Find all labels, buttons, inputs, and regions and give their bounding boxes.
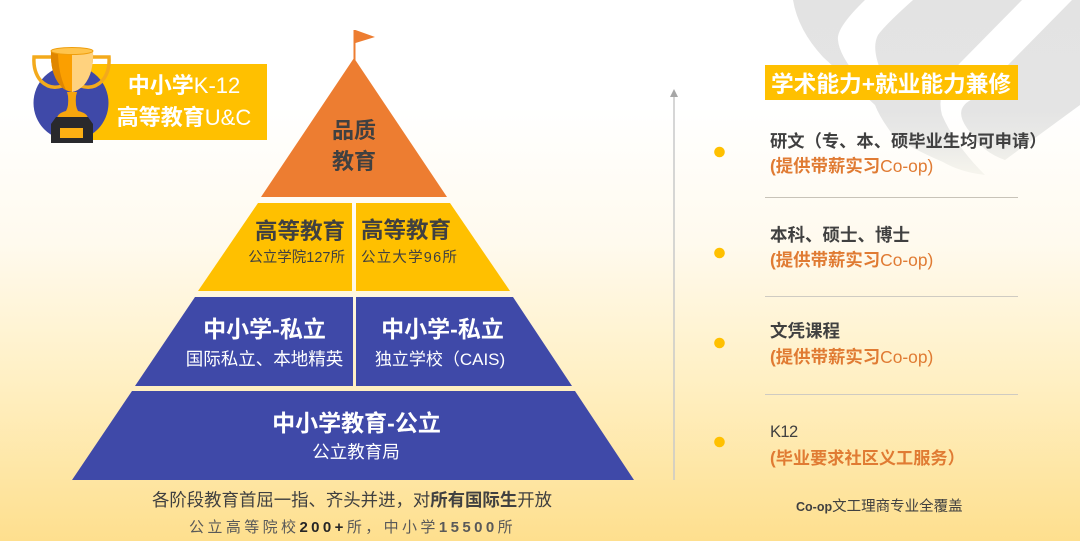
list item: certificates: (提供带薪实习Co-op) xyxy=(770,347,933,367)
text block: co-op note: Co-op文工理商专业全覆盖 xyxy=(796,497,963,515)
pyramid tier: public: 公立教育局 xyxy=(312,442,400,462)
panel: pyramid xyxy=(72,30,634,480)
pyramid tier: public colleges: 高等教育 xyxy=(255,218,345,244)
badge background box xyxy=(90,64,267,140)
list item: K12: K12 xyxy=(770,423,798,441)
pyramid tier: public universities: 高等教育 xyxy=(361,217,451,243)
list item: diploma: (提供带薪实习Co-op) xyxy=(770,156,933,176)
text block: footnote xyxy=(152,490,552,536)
pyramid tier: public universities: 公立大学96所 xyxy=(361,249,458,266)
panel: badge xyxy=(34,48,267,143)
pyramid top: quality education: 品质 xyxy=(332,118,376,143)
pyramid tier: public universities xyxy=(356,203,510,291)
list item: certificates: 文凭课程 xyxy=(770,321,840,341)
list item: diploma: 研文（专、本、硕毕业生均可申请） xyxy=(770,131,1047,151)
text block: footnote: 各阶段教育首屈一指、齐头并进，对所有国际生开放 xyxy=(152,490,552,510)
pyramid tier: public colleges: 公立学院127所 xyxy=(248,249,345,266)
list item: diploma xyxy=(714,131,1047,198)
badge text xyxy=(117,73,251,130)
arrow: vertical axis xyxy=(670,89,678,480)
pyramid top: quality education xyxy=(261,58,447,197)
pyramid tier: public colleges xyxy=(198,203,352,291)
pyramid top: quality education: 教育 xyxy=(332,149,376,174)
icon: trophy xyxy=(34,48,109,143)
pyramid tier: private international: 中小学-私立 xyxy=(203,316,326,342)
list item: K12: (毕业要求社区义工服务） xyxy=(770,448,965,468)
pyramid tier: public xyxy=(72,391,634,480)
text block: footnote: 公立高等院校200+所，中小学15500所 xyxy=(189,518,516,536)
badge text: 高等教育U&C xyxy=(117,105,251,130)
badge circle xyxy=(34,66,108,140)
background logo shapes xyxy=(793,0,1080,175)
list item: degrees: 本科、硕士、博士 xyxy=(770,225,910,245)
pyramid tier: private international xyxy=(135,297,353,386)
badge text: 中小学K-12 xyxy=(128,73,240,98)
list item: degrees: (提供带薪实习Co-op) xyxy=(770,250,933,270)
pyramid tier: private independent: 中小学-私立 xyxy=(381,316,504,342)
heading: academic and employment: 学术能力+就业能力兼修 xyxy=(771,71,1011,97)
list item: K12 xyxy=(714,423,965,468)
list item: certificates xyxy=(714,321,1018,394)
pyramid tier: private independent xyxy=(356,297,572,386)
list item: degrees xyxy=(714,225,1018,296)
pyramid tier: public: 中小学教育-公立 xyxy=(272,410,441,436)
icon: flag xyxy=(354,30,375,60)
pyramid tier: private international: 国际私立、本地精英 xyxy=(186,349,343,369)
pyramid tier: private independent: 独立学校（CAIS) xyxy=(375,350,505,369)
